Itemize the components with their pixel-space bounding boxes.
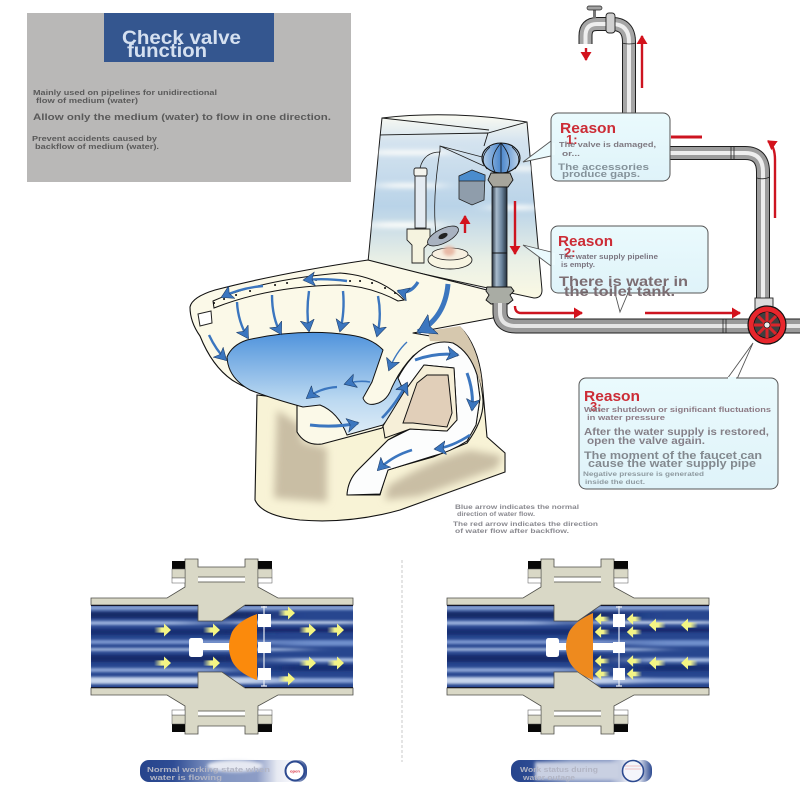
- bowl and rim deck: [190, 260, 510, 495]
- callout: reason 3: cause the water supply pipe: [588, 458, 756, 470]
- legend: arrow colour notes: Blue arrow indicates the normal: [455, 504, 579, 511]
- panel: check valve function intro: [27, 13, 351, 182]
- label pill: normal working state: Normal working state when: [147, 765, 270, 774]
- legend: arrow colour notes: direction of water flow.: [457, 511, 535, 518]
- heading: check valve function: function: [127, 41, 207, 62]
- callout: reason 3: The moment of the faucet can: [584, 450, 762, 462]
- red backflow arrows: [465, 36, 775, 313]
- callout: reason 1: produce gaps.: [562, 169, 640, 180]
- bowl water: [227, 332, 480, 495]
- label pill: work status during outage: Work status during: [520, 765, 598, 774]
- callout: reason 2: is empty.: [561, 262, 595, 269]
- callout: reason 1: 1:: [566, 132, 578, 147]
- callout: reason 3: [579, 343, 778, 489]
- legend: arrow colour notes: of water flow after backflow.: [455, 528, 569, 535]
- text: usage description: Mainly used on pipelines for unidirectional: [33, 88, 217, 97]
- callout: reason 2: There is water in: [559, 273, 688, 289]
- callout: reason 1: [523, 113, 670, 181]
- blue flow arrows: [209, 279, 472, 470]
- overflow square: [198, 311, 212, 326]
- callout: reason 3: Negative pressure is generated: [583, 471, 704, 478]
- callout: reason 2: the toilet tank.: [564, 283, 675, 299]
- diagram: check valve open, normal flow: [50, 559, 390, 734]
- cream trap wall: [383, 365, 457, 438]
- callout: reason 3: 3:: [590, 399, 602, 414]
- toilet tank: [368, 115, 542, 298]
- callout: reason 2: [523, 226, 708, 312]
- callout: reason 2: 2:: [564, 245, 576, 260]
- callout: reason 1: The valve is damaged,: [559, 140, 656, 149]
- toilet base: [255, 327, 505, 521]
- heading: check valve function: Check valve: [122, 28, 241, 49]
- illustration: toilet cross-section: [190, 115, 542, 521]
- icon: red gate valve: [748, 306, 786, 344]
- rim dots: [214, 280, 395, 303]
- flow arrows left: [595, 613, 698, 680]
- text: usage description: [32, 88, 331, 151]
- valve disc closed: [546, 606, 625, 686]
- tan shoulder: [428, 326, 483, 395]
- label pill: normal working state: water is flowing: [149, 773, 222, 782]
- base shading: [274, 410, 502, 502]
- text: usage description: flow of medium (water): [36, 96, 139, 105]
- white trap passage: [347, 342, 480, 495]
- supply column: [486, 187, 514, 304]
- flow arrows right: [154, 606, 344, 686]
- callout: reason 3: Reason: [584, 388, 640, 405]
- float valve assembly in tank: [407, 146, 486, 269]
- label pill: work status during outage: water outage: [522, 773, 575, 782]
- label pill: normal working state: open: [290, 770, 301, 774]
- divider: [401, 560, 403, 762]
- text: usage description: Allow only the medium (water) to flow in one direction.: [33, 112, 331, 123]
- faucet fittings: [587, 6, 773, 310]
- ball valve top: [482, 143, 520, 187]
- callout: reason 1: The accessories: [558, 162, 649, 173]
- rim channel: [213, 273, 404, 308]
- text: usage description: backflow of medium (water).: [35, 142, 159, 151]
- label pill: work status during outage: [511, 760, 652, 782]
- callout: reason 2: The water supply pipeline: [559, 254, 658, 261]
- callout: reason 3: in water pressure: [587, 413, 665, 422]
- callout: reason 1: Reason: [560, 120, 616, 137]
- valve disc open: [189, 606, 271, 686]
- callout: reason 1: or...: [562, 149, 580, 158]
- pipe network: [500, 24, 800, 333]
- callout: reason 3: inside the duct.: [585, 479, 645, 486]
- diagram: check valve closed, water outage: [406, 559, 746, 734]
- legend: arrow colour notes: The red arrow indicates the direction: [453, 521, 598, 528]
- callout: reason 3: open the valve again.: [587, 436, 705, 447]
- label pill: normal working state: [140, 760, 307, 782]
- callout: reason 3: Water shutdown or significant fluctuations: [584, 405, 771, 414]
- callout: reason 3: After the water supply is restored,: [584, 427, 769, 438]
- text: usage description: Prevent accidents caused by: [32, 134, 158, 143]
- heading: check valve function: [104, 13, 274, 62]
- legend: arrow colour notes: [453, 504, 598, 535]
- tan internal wall: [403, 375, 452, 427]
- callout: reason 2: Reason: [558, 233, 613, 250]
